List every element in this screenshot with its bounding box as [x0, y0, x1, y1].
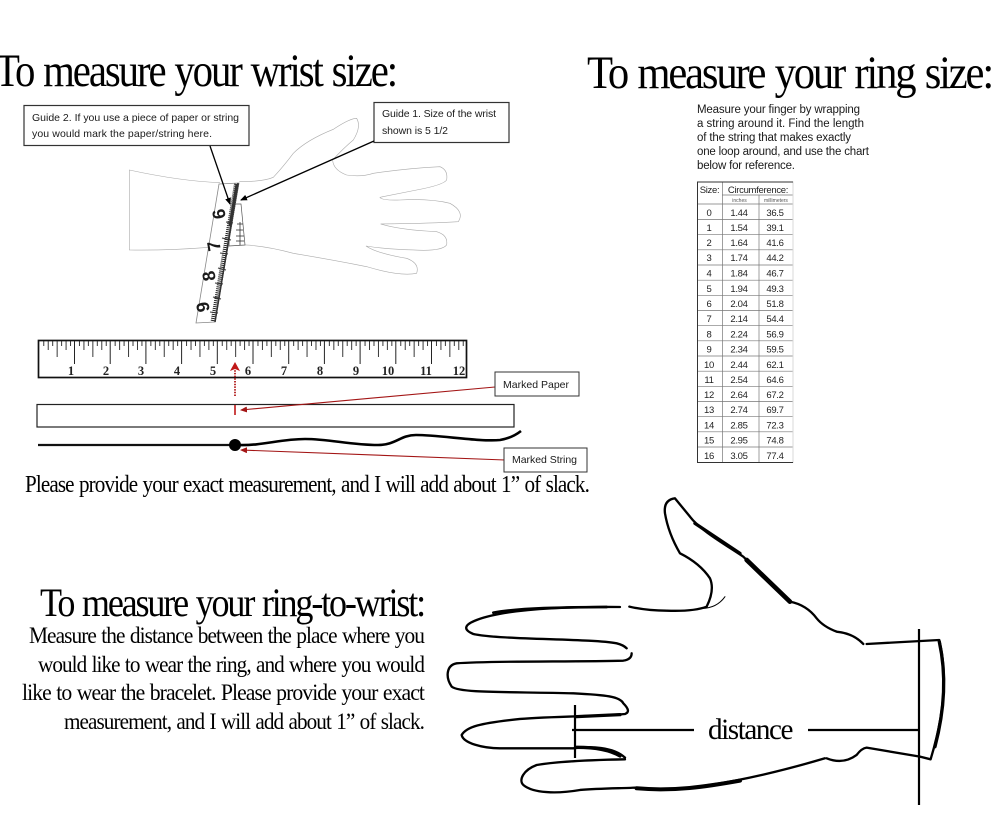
table rows: 1.64: [730, 238, 748, 249]
icon: measuring tape around wrist: 6: [208, 207, 230, 221]
callout: marked paper: Marked Paper: [503, 379, 570, 391]
ruler: 10: [382, 364, 394, 378]
table rows: 77.4: [766, 451, 784, 462]
table rows: 2.14: [730, 314, 748, 325]
table rows: 46.7: [766, 268, 784, 280]
table rows: 1.94: [730, 284, 748, 295]
table rows: 9: [707, 344, 712, 356]
table header: [700, 185, 788, 204]
callout: guide 2: Guide 2. If you use a piece of paper or string: [32, 112, 239, 124]
title: wrist size: To measure your wrist size:: [0, 45, 396, 97]
table rows: 1.54: [730, 223, 748, 234]
table rows: 2.24: [730, 330, 748, 340]
table rows: 13: [704, 405, 714, 416]
table rows: 16: [704, 451, 714, 462]
callout: guide 1: Guide 1. Size of the wrist: [382, 108, 496, 120]
ruler: 2: [103, 364, 109, 378]
table header: Size:: [700, 185, 719, 196]
table rows: 72.3: [766, 420, 784, 432]
text: slack note: Please provide your exact measurement, and I will add about 1” of slack.: [25, 472, 589, 498]
text: ring-to-wrist instructions: would like to wear the ring, and where you would: [38, 652, 425, 677]
arrow: guide 2 pointer: [210, 146, 230, 204]
table rows: 2.54: [730, 375, 748, 386]
icon: measuring tape around wrist: 8: [198, 269, 220, 283]
text: ring-to-wrist instructions: measurement, and I will add about 1” of slack.: [64, 709, 424, 734]
table rows: 11: [704, 375, 714, 386]
icon: measuring tape around wrist: 7: [203, 239, 225, 253]
table rows: 51.8: [766, 299, 784, 310]
table rows: 67.2: [766, 390, 784, 401]
table rows: 1.74: [730, 253, 748, 264]
table rows: 8: [707, 330, 712, 340]
table rows: 4: [707, 268, 712, 280]
table rows: 2.34: [730, 344, 748, 356]
table rows: 62.1: [766, 360, 784, 371]
table rows: 3.05: [730, 451, 748, 462]
panel: hand with distance measurement: [448, 498, 944, 805]
ruler: 3: [138, 364, 144, 378]
table rows: 1.44: [730, 208, 748, 219]
table rows: [704, 208, 784, 462]
table rows: 69.7: [766, 405, 784, 416]
title: ring-to-wrist: To measure your ring-to-wrist:: [40, 580, 424, 625]
icon: outline of wrist and hand: [129, 118, 460, 274]
icon: measuring tape around wrist: [192, 183, 245, 323]
table rows: 2.85: [730, 420, 748, 432]
text: ring-to-wrist instructions: Measure the distance between the place where you: [29, 623, 425, 648]
red mark on paper: [234, 405, 236, 415]
ruler: 4: [174, 364, 181, 378]
table rows: 10: [704, 360, 714, 371]
table rows: 2.74: [730, 405, 748, 416]
table rows: 49.3: [766, 284, 784, 295]
table header: inches: [732, 198, 747, 204]
text: ring size instructions: below for reference.: [697, 160, 795, 172]
callout: guide 2: [24, 106, 249, 146]
text: ring size instructions: of the string that makes exactly: [697, 132, 851, 144]
table rows: 3: [707, 253, 712, 264]
callout: marked string: Marked String: [512, 454, 577, 466]
measurement line and end bars: [572, 629, 919, 805]
text: ring size instructions: a string around it. Find the length: [697, 118, 864, 130]
ruler: 8: [317, 364, 323, 378]
table rows: 64.6: [766, 375, 784, 386]
text: ring size instructions: Measure your finger by wrapping: [697, 104, 860, 116]
text: ring-to-wrist instructions: like to wear the bracelet. Please provide your exact: [22, 680, 426, 705]
table rows: 0: [707, 208, 712, 219]
ruler: 1: [68, 364, 74, 378]
callout: guide 2: you would mark the paper/string here.: [32, 128, 212, 140]
callout: marked paper: [495, 372, 579, 396]
ruler: 9: [353, 364, 359, 378]
table rows: 56.9: [766, 330, 784, 340]
table rows: 44.2: [766, 253, 784, 264]
table rows: 36.5: [766, 208, 784, 219]
table rows: 7: [707, 314, 712, 325]
table rows: 39.1: [766, 223, 784, 234]
callout: guide 1: shown is 5 1/2: [382, 125, 448, 137]
marked paper strip: [37, 404, 514, 427]
table rows: 1.84: [730, 268, 748, 280]
panel: ruler comparison: [37, 340, 587, 472]
table rows: 41.6: [766, 238, 784, 249]
table header: Circumference:: [728, 185, 788, 196]
table rows: 54.4: [766, 314, 784, 325]
ruler: 11: [420, 364, 432, 378]
label: distance: distance: [708, 713, 793, 746]
table rows: 15: [704, 436, 714, 446]
table rows: 12: [704, 390, 714, 401]
callout: marked string: [504, 448, 587, 472]
table rows: 2.64: [730, 390, 748, 401]
table rows: 14: [704, 420, 714, 432]
arrow: marked paper pointer: [241, 387, 495, 410]
ruler: 12: [453, 364, 465, 378]
icon: measuring tape around wrist: 9: [192, 300, 214, 314]
table rows: 2.04: [730, 299, 748, 310]
panel: wrist hand illustration: [24, 102, 509, 323]
ruler: 5: [210, 364, 216, 378]
table rows: 2.44: [730, 360, 748, 371]
icon: large hand outline: [448, 498, 944, 792]
table rows: 74.8: [766, 436, 784, 446]
table header: millimeters: [764, 198, 788, 204]
table: ring size chart: [698, 182, 793, 462]
text: ring size instructions: [697, 104, 870, 172]
table rows: 2.95: [730, 436, 748, 446]
table rows: 59.5: [766, 344, 784, 356]
ruler: 6: [245, 364, 251, 378]
text: ring size instructions: one loop around, and use the chart: [697, 146, 870, 158]
arrow: dotted red up to ruler: [230, 362, 240, 396]
table rows: 6: [707, 299, 712, 310]
marked string: [38, 431, 521, 451]
callout: guide 1: [374, 102, 509, 142]
table rows: 5: [707, 284, 712, 295]
arrow: marked string pointer: [241, 450, 505, 460]
text: ring-to-wrist instructions: [22, 623, 426, 734]
table rows: 1: [707, 223, 712, 234]
ruler: [38, 340, 466, 378]
table rows: 2: [707, 238, 712, 249]
ruler: 7: [281, 364, 287, 378]
arrow: guide 1 pointer: [241, 141, 374, 200]
